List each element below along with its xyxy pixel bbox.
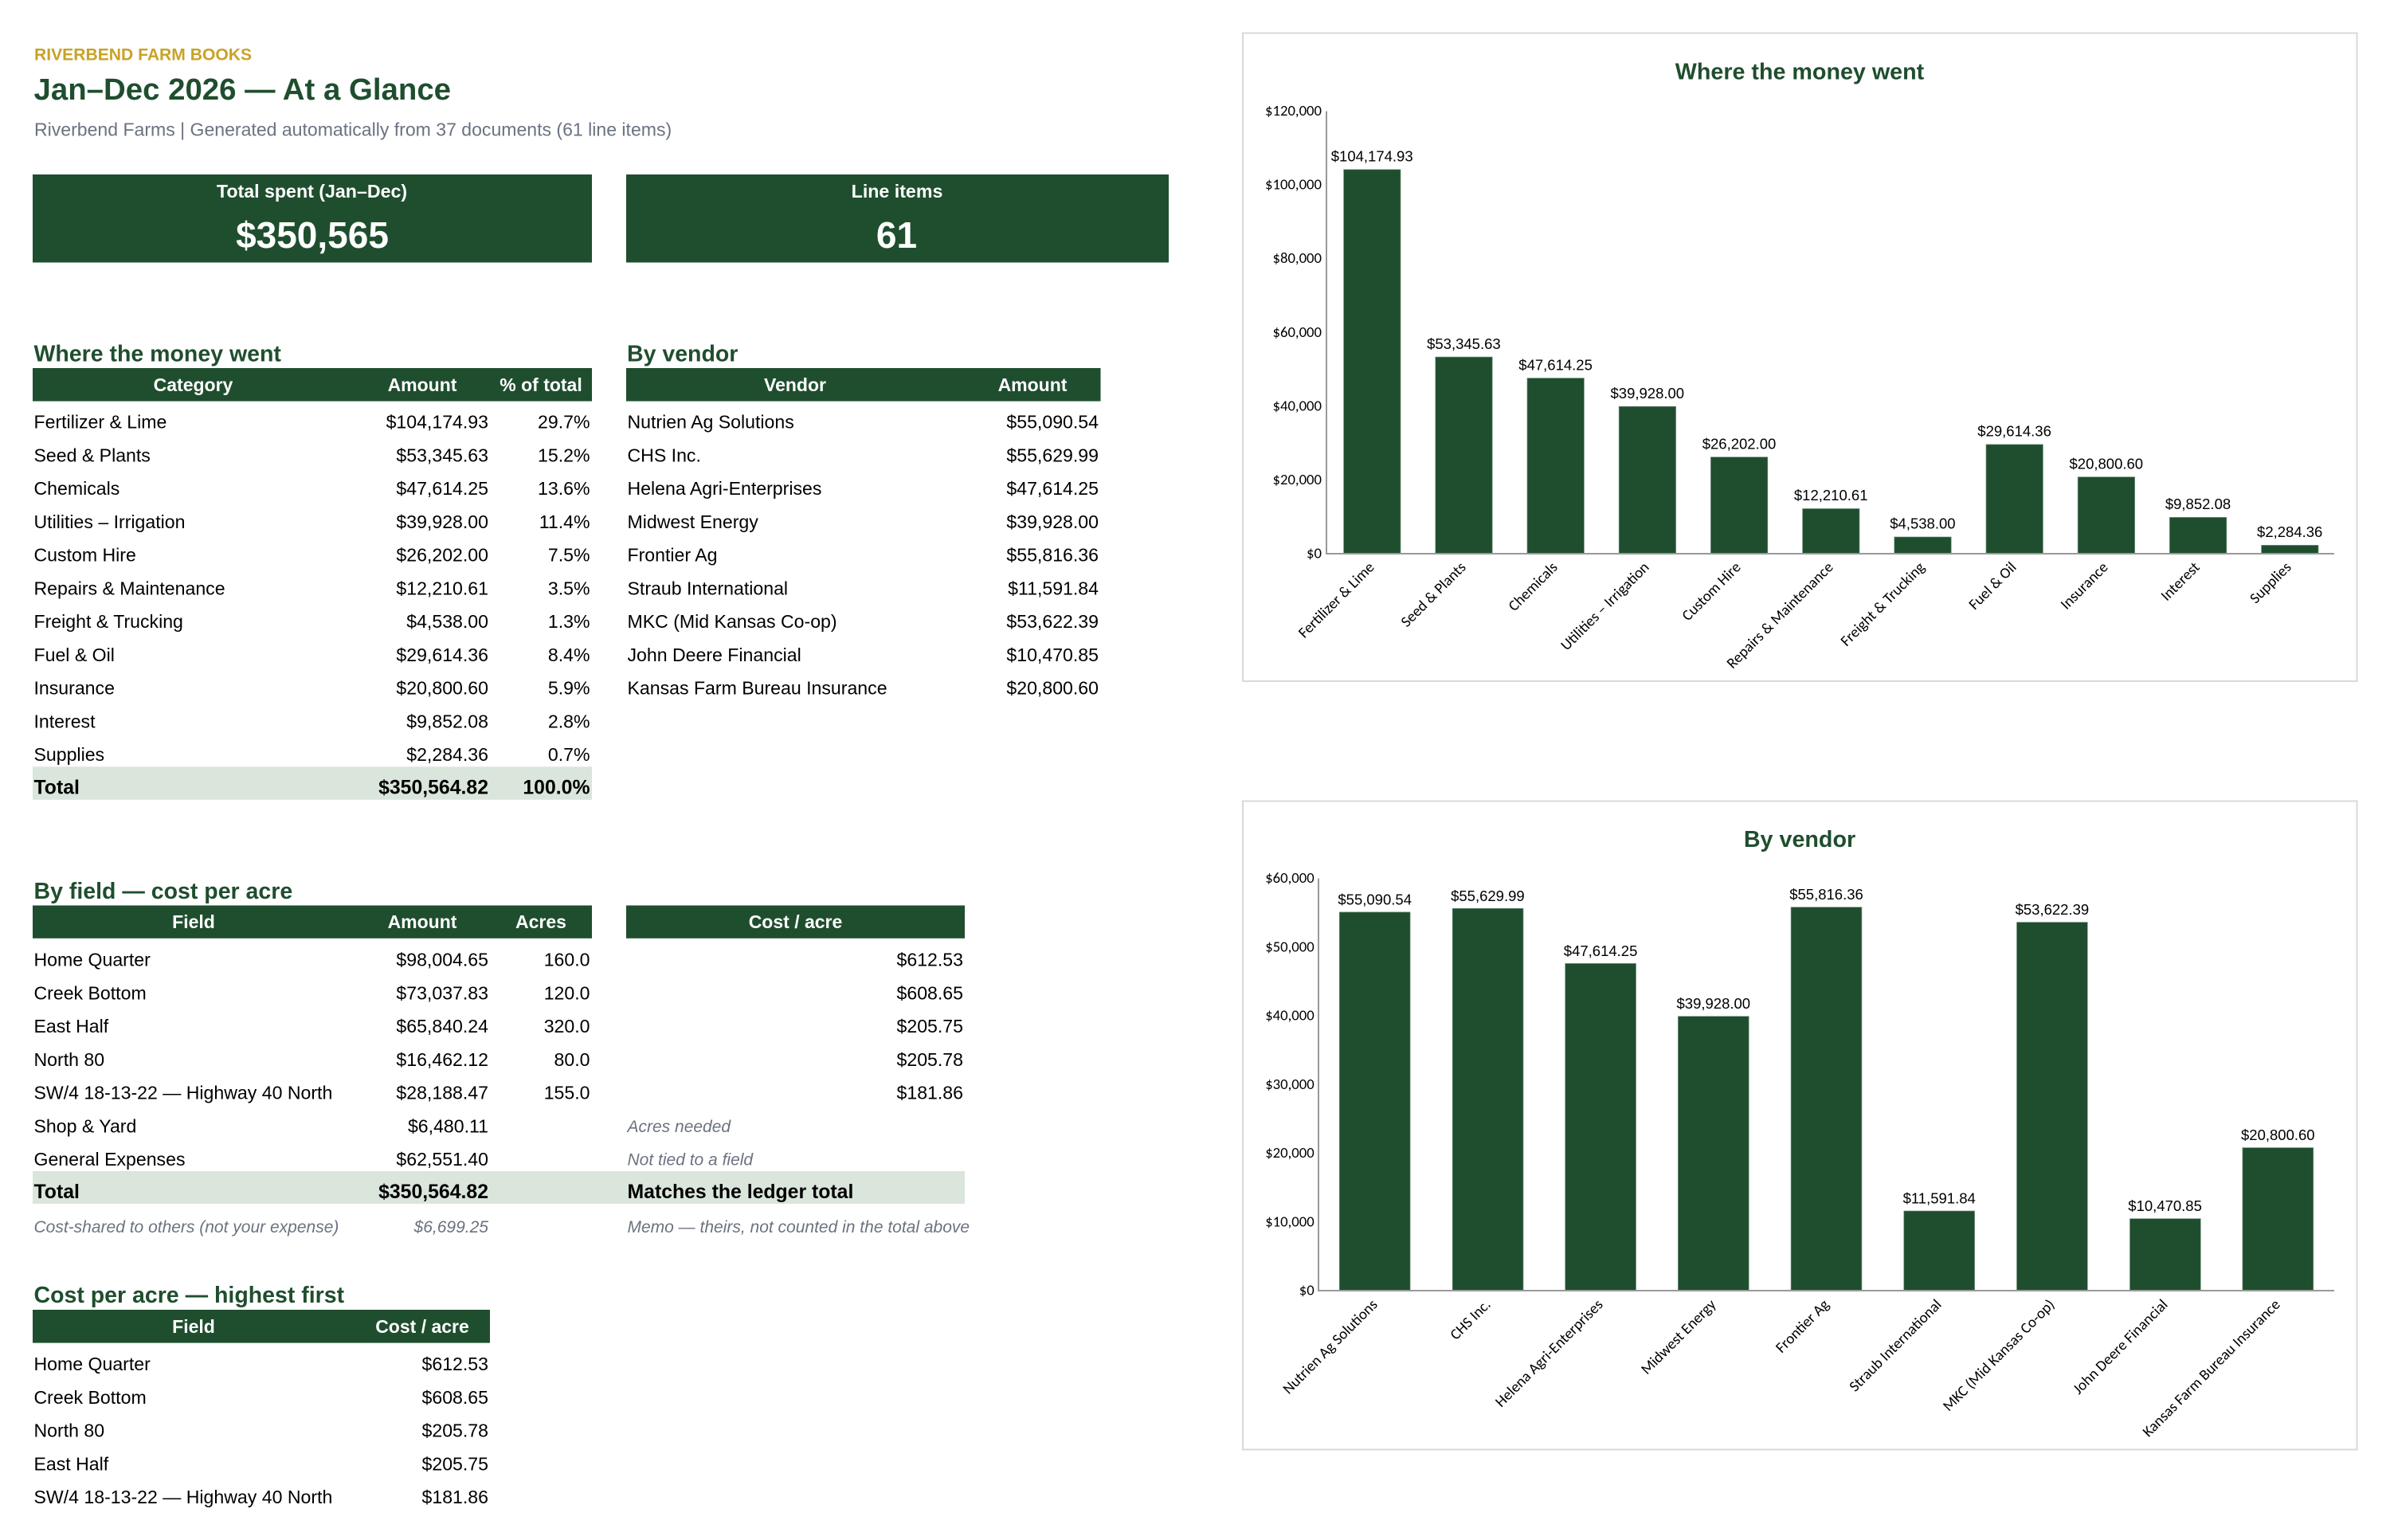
table rows: SW/4 18-13-22 — Highway 40 North [33, 1083, 332, 1103]
table header: % of total [500, 374, 582, 395]
value labels: $47,614.25 [1518, 356, 1593, 373]
table rows: Chemicals [33, 478, 120, 499]
table header: Acres [515, 911, 566, 932]
table rows: 80.0 [554, 1049, 590, 1070]
table rows: $26,202.00 [396, 545, 488, 566]
table rows: Interest [33, 711, 96, 731]
table rows: John Deere Financial [628, 645, 801, 665]
category labels: Seed & Plants [1397, 558, 1470, 631]
KPI card: line items: Line items [852, 181, 942, 202]
table rows: Custom Hire [33, 545, 136, 566]
table rows: $20,800.60 [396, 677, 488, 698]
y axis: $30,000 [1265, 1076, 1314, 1094]
vendor labels: CHS Inc. [1447, 1295, 1495, 1344]
value labels: $53,622.39 [2016, 901, 2089, 918]
table rows [33, 1354, 488, 1507]
category labels: Supplies [2247, 558, 2295, 608]
value labels: $2,284.36 [2257, 523, 2322, 540]
y axis: $100,000 [1265, 176, 1322, 194]
table rows: 1.3% [548, 611, 590, 632]
table rows: Fuel & Oil [33, 645, 115, 665]
total row: $350,564.82 [378, 778, 488, 798]
table header: Field [172, 1316, 215, 1337]
table rows: Kansas Farm Bureau Insurance [628, 677, 887, 698]
value labels: $26,202.00 [1702, 435, 1776, 452]
y axis: $60,000 [1265, 869, 1314, 888]
table rows: Repairs & Maintenance [33, 578, 225, 598]
y axis: $80,000 [1273, 249, 1322, 268]
vendor labels: Kansas Farm Bureau Insurance [2139, 1295, 2284, 1441]
category labels: Fuel & Oil [1965, 558, 2020, 614]
total row: 100.0% [523, 778, 590, 798]
table rows: North 80 [33, 1049, 104, 1070]
x axis line [1326, 553, 2334, 554]
table rows: Helena Agri-Enterprises [628, 478, 821, 499]
table header: Vendor [764, 374, 826, 395]
category labels: Utilities – Irrigation [1557, 558, 1653, 655]
table rows: $53,345.63 [396, 445, 488, 465]
table rows: 160.0 [544, 950, 590, 970]
total row: $350,564.82 [378, 1181, 488, 1203]
y axis: $0 [1307, 545, 1322, 562]
KPI card: line items: 61 [876, 214, 917, 256]
table rows: $65,840.24 [396, 1016, 488, 1036]
table header: Amount [388, 374, 457, 395]
table rows: $98,004.65 [396, 950, 488, 970]
table rows: $205.75 [897, 1016, 963, 1036]
value labels [1338, 886, 2315, 1214]
value labels: $12,210.61 [1794, 487, 1867, 504]
memo row: Cost-shared to others (not your expense) [33, 1218, 339, 1236]
table rows: Frontier Ag [628, 545, 717, 566]
chart panel: by vendor [1243, 801, 2357, 1450]
table rows: Not tied to a field [628, 1150, 754, 1170]
value labels: $55,090.54 [1338, 891, 1412, 907]
table rows: $181.86 [422, 1487, 488, 1507]
vendor labels: Helena Agri-Enterprises [1491, 1295, 1607, 1411]
eyebrow: brand: RIVERBEND FARM BOOKS [34, 46, 252, 65]
subtitle: Riverbend Farms | Generated automatically from 37 documents (61 line items) [34, 120, 672, 140]
table header: Cost / acre [375, 1316, 469, 1337]
table rows: MKC (Mid Kansas Co-op) [628, 611, 837, 632]
value labels: $53,345.63 [1427, 335, 1501, 352]
value labels: $11,591.84 [1903, 1190, 1976, 1206]
heading: by vendor: By vendor [627, 341, 738, 366]
vendor labels: Nutrien Ag Solutions [1279, 1295, 1381, 1398]
table rows: 15.2% [538, 445, 590, 465]
value labels: $10,470.85 [2128, 1197, 2202, 1214]
table header [33, 905, 965, 938]
vendor labels: Straub International [1846, 1295, 1945, 1396]
value labels: $104,174.93 [1331, 148, 1413, 164]
value labels: $20,800.60 [2241, 1127, 2315, 1143]
category labels: Chemicals [1505, 558, 1561, 615]
table rows: $47,614.25 [1006, 478, 1099, 499]
category labels: Fertilizer & Lime [1295, 558, 1378, 642]
table rows: General Expenses [33, 1149, 185, 1170]
table rows: $612.53 [422, 1354, 488, 1374]
table rows: $2,284.36 [406, 744, 488, 765]
table rows: $73,037.83 [396, 982, 488, 1003]
table rows: East Half [33, 1453, 109, 1474]
panel: cost per acre ranking [33, 1283, 490, 1507]
table rows: East Half [33, 1016, 109, 1036]
table rows: Utilities – Irrigation [33, 511, 185, 532]
table rows: $16,462.12 [396, 1049, 488, 1070]
category labels: Repairs & Maintenance [1723, 558, 1837, 672]
value labels [1331, 148, 2322, 540]
table rows: Insurance [33, 677, 115, 698]
table rows: $181.86 [897, 1083, 963, 1103]
vendor labels: John Deere Financial [2069, 1295, 2172, 1398]
value labels: $55,629.99 [1451, 888, 1525, 904]
table rows: $6,480.11 [408, 1115, 488, 1136]
KPI card: total spent: $350,565 [236, 214, 389, 256]
table rows: 8.4% [548, 645, 590, 665]
category labels [1295, 558, 2295, 672]
y axis: $40,000 [1273, 397, 1322, 415]
table rows: Creek Bottom [33, 1387, 147, 1408]
heading: where the money went: Where the money went [33, 341, 281, 366]
value labels: $39,928.00 [1611, 385, 1684, 402]
bars [1344, 170, 2318, 554]
table rows [628, 411, 1099, 698]
total row: Total [33, 1181, 80, 1203]
y axis [1265, 102, 1326, 562]
table rows: $55,629.99 [1006, 445, 1099, 465]
table rows: 2.8% [548, 711, 590, 731]
table rows: 5.9% [548, 677, 590, 698]
y axis: $10,000 [1265, 1213, 1314, 1231]
table rows: Fertilizer & Lime [33, 411, 167, 432]
table rows: $12,210.61 [396, 578, 488, 598]
table rows: Seed & Plants [33, 445, 151, 465]
total row [33, 766, 592, 800]
table rows: $104,174.93 [386, 411, 488, 432]
value labels: $20,800.60 [2070, 455, 2143, 472]
table rows: $62,551.40 [396, 1149, 488, 1170]
table header [33, 1310, 490, 1343]
table rows: 320.0 [544, 1016, 590, 1036]
table rows: 0.7% [548, 744, 590, 765]
table rows: $39,928.00 [396, 511, 488, 532]
category labels: Freight & Trucking [1837, 558, 1929, 650]
table header: Cost / acre [749, 911, 842, 932]
table rows: $608.65 [897, 982, 963, 1003]
value labels: $47,614.25 [1564, 942, 1637, 959]
table rows: Acres needed [626, 1118, 731, 1136]
table rows: $205.78 [422, 1420, 488, 1440]
table rows: North 80 [33, 1420, 104, 1440]
table header [626, 368, 1101, 402]
panel: category table [33, 341, 592, 800]
table rows: $47,614.25 [396, 478, 488, 499]
table rows: $612.53 [897, 950, 963, 970]
table rows: Midwest Energy [628, 511, 758, 532]
panel: vendor table [626, 341, 1101, 698]
panel: by field table [33, 879, 970, 1236]
table header: Amount [388, 911, 457, 932]
category labels: Insurance [2057, 558, 2112, 613]
table rows: $55,090.54 [1006, 411, 1099, 432]
y axis: $40,000 [1265, 1007, 1314, 1025]
y axis: $50,000 [1265, 938, 1314, 956]
table rows: $10,470.85 [1006, 645, 1099, 665]
value labels: $39,928.00 [1677, 995, 1750, 1012]
table rows: Creek Bottom [33, 982, 147, 1003]
memo row: $6,699.25 [413, 1218, 488, 1236]
table rows: $608.65 [422, 1387, 488, 1408]
vendor labels [1279, 1295, 2284, 1441]
table rows: $28,188.47 [396, 1083, 488, 1103]
table rows: $9,852.08 [406, 711, 488, 731]
table rows: SW/4 18-13-22 — Highway 40 North [33, 1487, 332, 1507]
table rows: $205.78 [897, 1049, 963, 1070]
table rows: Straub International [628, 578, 788, 598]
y axis: $20,000 [1273, 471, 1322, 489]
category labels: Interest [2157, 558, 2204, 605]
value labels: $29,614.36 [1977, 423, 2051, 440]
value labels: $55,816.36 [1789, 886, 1863, 903]
total row: Total [33, 778, 80, 798]
table header: Category [154, 374, 233, 395]
table rows: $205.75 [422, 1453, 488, 1474]
table rows: 120.0 [544, 982, 590, 1003]
table header: Amount [998, 374, 1068, 395]
table header: Field [172, 911, 215, 932]
title: Jan–Dec 2026 — At a Glance [33, 72, 451, 107]
chart title: By vendor [1744, 827, 1855, 852]
category labels: Custom Hire [1679, 558, 1745, 625]
table rows: Shop & Yard [33, 1115, 136, 1136]
x axis line [1318, 1290, 2334, 1291]
table rows [33, 411, 590, 765]
y axis: $0 [1299, 1281, 1314, 1300]
table rows: Nutrien Ag Solutions [628, 411, 794, 432]
table header [33, 368, 592, 402]
table rows: 155.0 [544, 1083, 590, 1103]
table rows [33, 950, 963, 1170]
table rows: CHS Inc. [628, 445, 701, 465]
table rows: 7.5% [548, 545, 590, 566]
memo row: Memo — theirs, not counted in the total above [628, 1218, 970, 1236]
bars [1339, 907, 2314, 1291]
table rows: Home Quarter [33, 1354, 151, 1374]
table rows: $55,816.36 [1006, 545, 1099, 566]
table rows: 29.7% [538, 411, 590, 432]
heading: cost per acre: Cost per acre — highest first [33, 1283, 345, 1308]
vendor labels: Frontier Ag [1772, 1295, 1833, 1357]
vendor labels: Midwest Energy [1637, 1295, 1721, 1378]
total row: Matches the ledger total [628, 1181, 853, 1203]
table rows: $4,538.00 [406, 611, 488, 632]
y axis [1265, 869, 1318, 1300]
vendor labels: MKC (Mid Kansas Co-op) [1939, 1295, 2059, 1415]
table rows: Home Quarter [33, 950, 151, 970]
y axis: $20,000 [1265, 1144, 1314, 1162]
value labels: $9,852.08 [2165, 496, 2231, 512]
KPI card: total spent: Total spent (Jan–Dec) [217, 181, 407, 202]
table rows: $29,614.36 [396, 645, 488, 665]
table rows: $11,591.84 [1008, 578, 1099, 598]
table rows: $53,622.39 [1006, 611, 1099, 632]
table rows: Freight & Trucking [33, 611, 183, 632]
value labels: $4,538.00 [1890, 515, 1956, 532]
KPI card: total spent [33, 174, 592, 263]
table rows: $39,928.00 [1006, 511, 1099, 532]
y axis: $60,000 [1273, 323, 1322, 342]
chart panel: where the money went [1243, 33, 2357, 681]
table rows: 3.5% [548, 578, 590, 598]
y axis: $120,000 [1265, 102, 1322, 120]
table rows: 13.6% [538, 478, 590, 499]
KPI card: line items [626, 174, 1169, 263]
memo row [33, 1218, 970, 1236]
heading: by field: By field — cost per acre [33, 879, 292, 904]
table rows: Supplies [33, 744, 104, 765]
total row [33, 1171, 965, 1204]
table rows: 11.4% [539, 511, 590, 532]
table rows: $20,800.60 [1006, 677, 1099, 698]
chart title: Where the money went [1675, 59, 1925, 84]
